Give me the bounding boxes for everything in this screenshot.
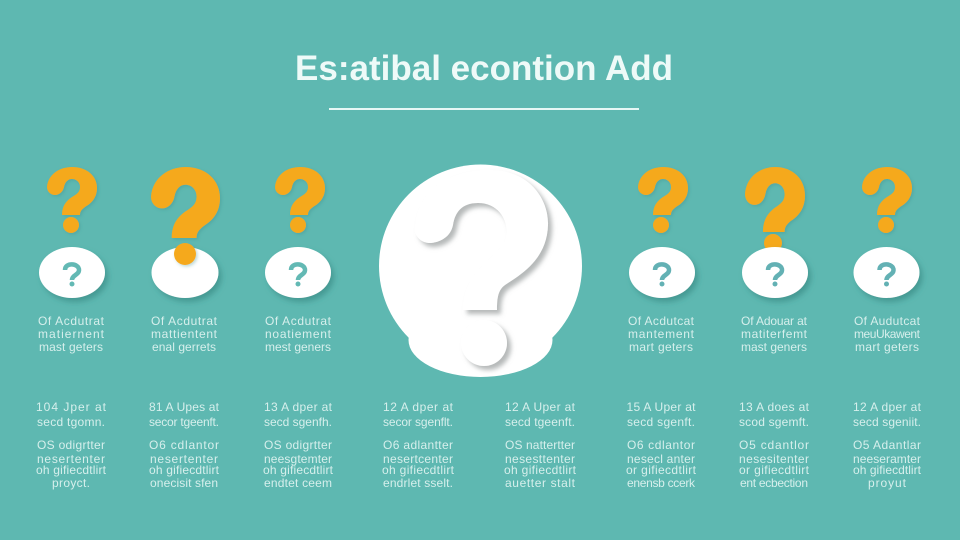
detail text 7: 13 A does at [739,400,810,414]
detail text 1: proyct. [52,476,90,490]
icon: orange question mark 8 [862,167,912,233]
label text 7: Of Adouar at [741,314,808,328]
detail text 3: oh gifiecdtlirt [263,463,334,477]
detail text 8 [853,400,922,490]
label text 2: mattientent [151,327,218,341]
detail text 1: OS odigrtter [37,438,105,452]
icon: white oval with teal question mark 7 [742,247,808,298]
detail text 7: ent ecbection [740,476,808,490]
detail text 3: secd sgenfh. [264,415,332,429]
detail text 2: oh gifiecdtlirt [149,463,220,477]
icon: orange question mark 3 [275,167,325,233]
detail text 1: nesertenter [37,452,105,466]
label text 1: matiernent [38,327,105,341]
detail text 8: proyut [868,476,907,490]
label text 1: Of Acdutrat [38,314,105,328]
label text 1 [38,314,105,354]
label text 8: meuUkawent [854,327,921,341]
icon: large orange question mark 7 [745,167,805,252]
icon: white oval with teal question mark 3 [265,247,331,298]
detail text 2: nesertenter [150,452,218,466]
detail text 1: oh gifiecdtlirt [36,463,107,477]
label text 6 [628,314,695,354]
column 2 [149,167,220,490]
detail text 7: scod sgemft. [739,415,809,429]
detail text 3: neesgtemter [264,452,332,466]
icon: orange question mark 1 [47,167,97,233]
detail text 3: 13 A dper at [264,400,333,414]
detail text 5: secd tgeenft. [505,415,575,429]
detail text 1 [36,400,107,490]
detail text 5: OS nattertter [505,438,575,452]
label text 3: mest geners [265,340,331,354]
label text 6: Of Acdutcat [628,314,695,328]
icon: orange question mark 6 [638,167,688,233]
detail text 1: 104 Jper at [36,400,107,414]
detail text 4 [382,400,455,490]
detail text 8: 12 A dper at [853,400,922,414]
circle body [379,164,582,377]
detail text 5: oh gifiecdtlirt [504,463,577,477]
title underline [329,108,639,110]
detail text 2: secor tgeenft. [149,415,219,429]
detail text 4: secor sgenflt. [383,415,453,429]
detail text 6: O6 cdlantor [627,438,695,452]
label text 3: noatiement [265,327,332,341]
detail text 2: 81 A Upes at [149,400,220,414]
detail text 1: secd tgomn. [37,415,105,429]
detail text 8: oh gifiecdtlirt [853,463,922,477]
label text 6: mart geters [629,340,693,354]
detail text 2: onecisit sfen [150,476,218,490]
column 3 [263,167,334,490]
label text 1: mast geters [39,340,103,354]
column 6 [626,167,697,490]
detail text 6: secd sgenft. [627,415,695,429]
label text 6: mantement [628,327,695,341]
detail text 7: or gifiecdtlirt [739,463,810,477]
detail text 3: endtet ceem [264,476,332,490]
detail text 4: endrlet sselt. [383,476,453,490]
column 7 [739,167,810,490]
label text 8: mart geters [855,340,919,354]
embossed question mark [415,170,548,366]
detail text 2 [149,400,220,490]
detail text 8: secd sgeniit. [853,415,921,429]
label text 7: matiterfemt [741,327,808,341]
label text 7: mast geners [741,340,807,354]
label text 7 [741,314,808,354]
icon: large orange question mark 2 [151,167,220,265]
icon: white oval 2 [152,247,218,298]
central white circle with question mark [379,164,582,377]
detail text 4: oh gifiecdtlirt [382,463,455,477]
detail text 5: nesesttenter [505,452,575,466]
detail text 6: 15 A Uper at [626,400,696,414]
icon: white oval with teal question mark 1 [39,247,105,298]
detail text 4: O6 adlantter [383,438,453,452]
label text 2: enal gerrets [152,340,216,354]
detail text 6: or gifiecdtlirt [626,463,697,477]
detail text 7 [739,400,810,490]
detail text 3 [263,400,334,490]
detail text 6 [626,400,697,490]
detail text 4: 12 A dper at [383,400,454,414]
detail text 5 [504,400,577,490]
detail text 5: 12 A Uper at [505,400,576,414]
detail text 3: OS odigrtter [264,438,332,452]
detail text 7: O5 cdantlor [739,438,809,452]
column 1 [36,167,107,490]
detail text 8: O5 Adantlar [853,438,921,452]
detail text 2: O6 cdlantor [149,438,219,452]
icon: white oval with teal question mark 8 [854,247,920,298]
label text 2: Of Acdutrat [151,314,218,328]
detail text 8: neeseramter [853,452,921,466]
column 8 [853,167,922,490]
label text 3 [265,314,332,354]
detail text 6: nesecl anter [627,452,695,466]
detail text 4: nesertcenter [383,452,453,466]
label text 8: Of Audutcat [854,314,921,328]
icon: white oval with teal question mark 6 [629,247,695,298]
detail text 5: auetter stalt [505,476,576,490]
label text 8 [854,314,921,354]
detail text 7: nesesitenter [739,452,809,466]
detail text 6: enensb ccerk [627,476,696,490]
label text 2 [151,314,218,354]
title: Es:atibal econtion Add [295,49,673,88]
label text 3: Of Acdutrat [265,314,332,328]
